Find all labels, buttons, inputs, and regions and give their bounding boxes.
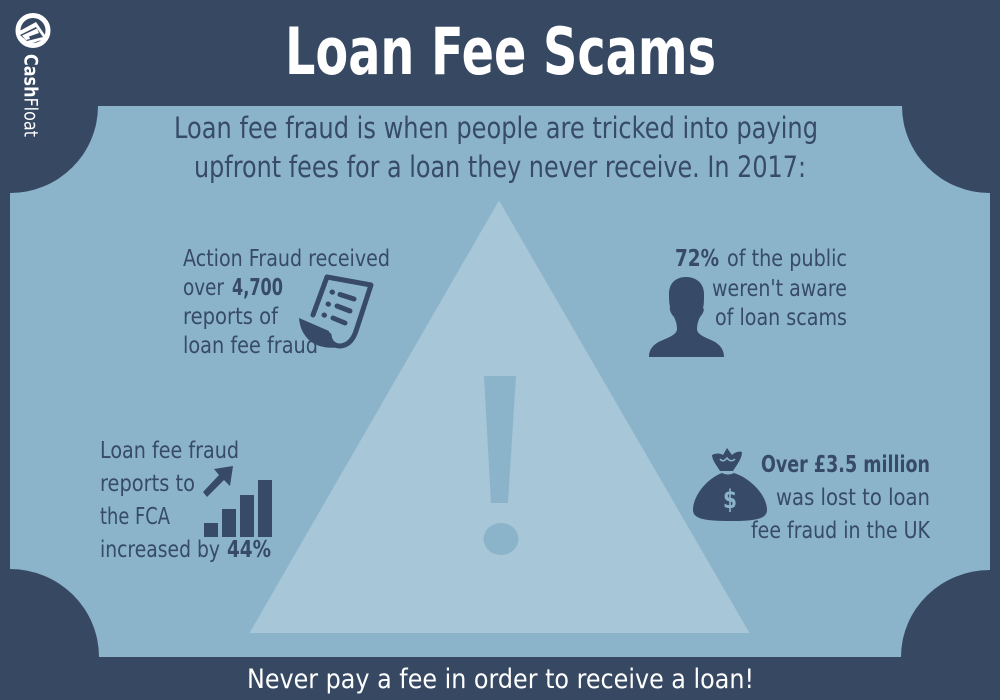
stat: FCA reports increase [100,438,271,563]
intro text [174,111,818,184]
stat: Over £3.5 million [751,452,931,544]
stat: Over £3.5 million: fee fraud in the UK [751,518,931,544]
stat: Over £3.5 million: Over £3.5 million [761,452,930,478]
stat: 72% of the public: of loan scams [715,305,847,331]
stat: Action Fraud reports: 4,700 [232,275,283,301]
stat: 72% of the public [675,246,847,331]
icon: person silhouette [649,277,724,357]
stat: FCA reports increase: the FCA [100,504,170,530]
footer message: Never pay a fee in order to receive a loan! [247,664,754,695]
stat: FCA reports increase: reports to [100,471,195,497]
stat: Action Fraud reports: over [183,275,224,301]
intro text: upfront fees for a loan they never receive. In 2017: [194,150,806,184]
logo: CashFloat [16,16,48,137]
stat: 72% of the public: of the public [727,246,847,272]
stat: Action Fraud reports [183,246,390,359]
logo: CashFloat: CashFloat [20,54,42,137]
intro text: Loan fee fraud is when people are tricked into paying [174,111,818,145]
icon: money bag: $ [723,485,737,515]
stat: Over £3.5 million: was lost to loan [776,485,930,511]
stat: Action Fraud reports: loan fee fraud [183,333,318,359]
stat: FCA reports increase: Loan fee fraud [100,438,239,464]
stat: FCA reports increase: 44% [227,537,271,563]
icon: document scroll [299,277,371,348]
icon: money bag [693,448,767,521]
stat: 72% of the public: weren't aware [712,276,847,302]
title: Loan Fee Scams [285,15,716,90]
panel: main light blue ticket panel [10,106,990,657]
stat: Action Fraud reports: Action Fraud received [183,246,390,272]
stat: 72% of the public: 72% [675,246,719,272]
icon: rising bar chart with arrow [203,466,272,537]
warning triangle with exclamation mark [250,200,750,633]
stat: Action Fraud reports: reports of [183,304,279,330]
stat: FCA reports increase: increased by [100,537,220,563]
